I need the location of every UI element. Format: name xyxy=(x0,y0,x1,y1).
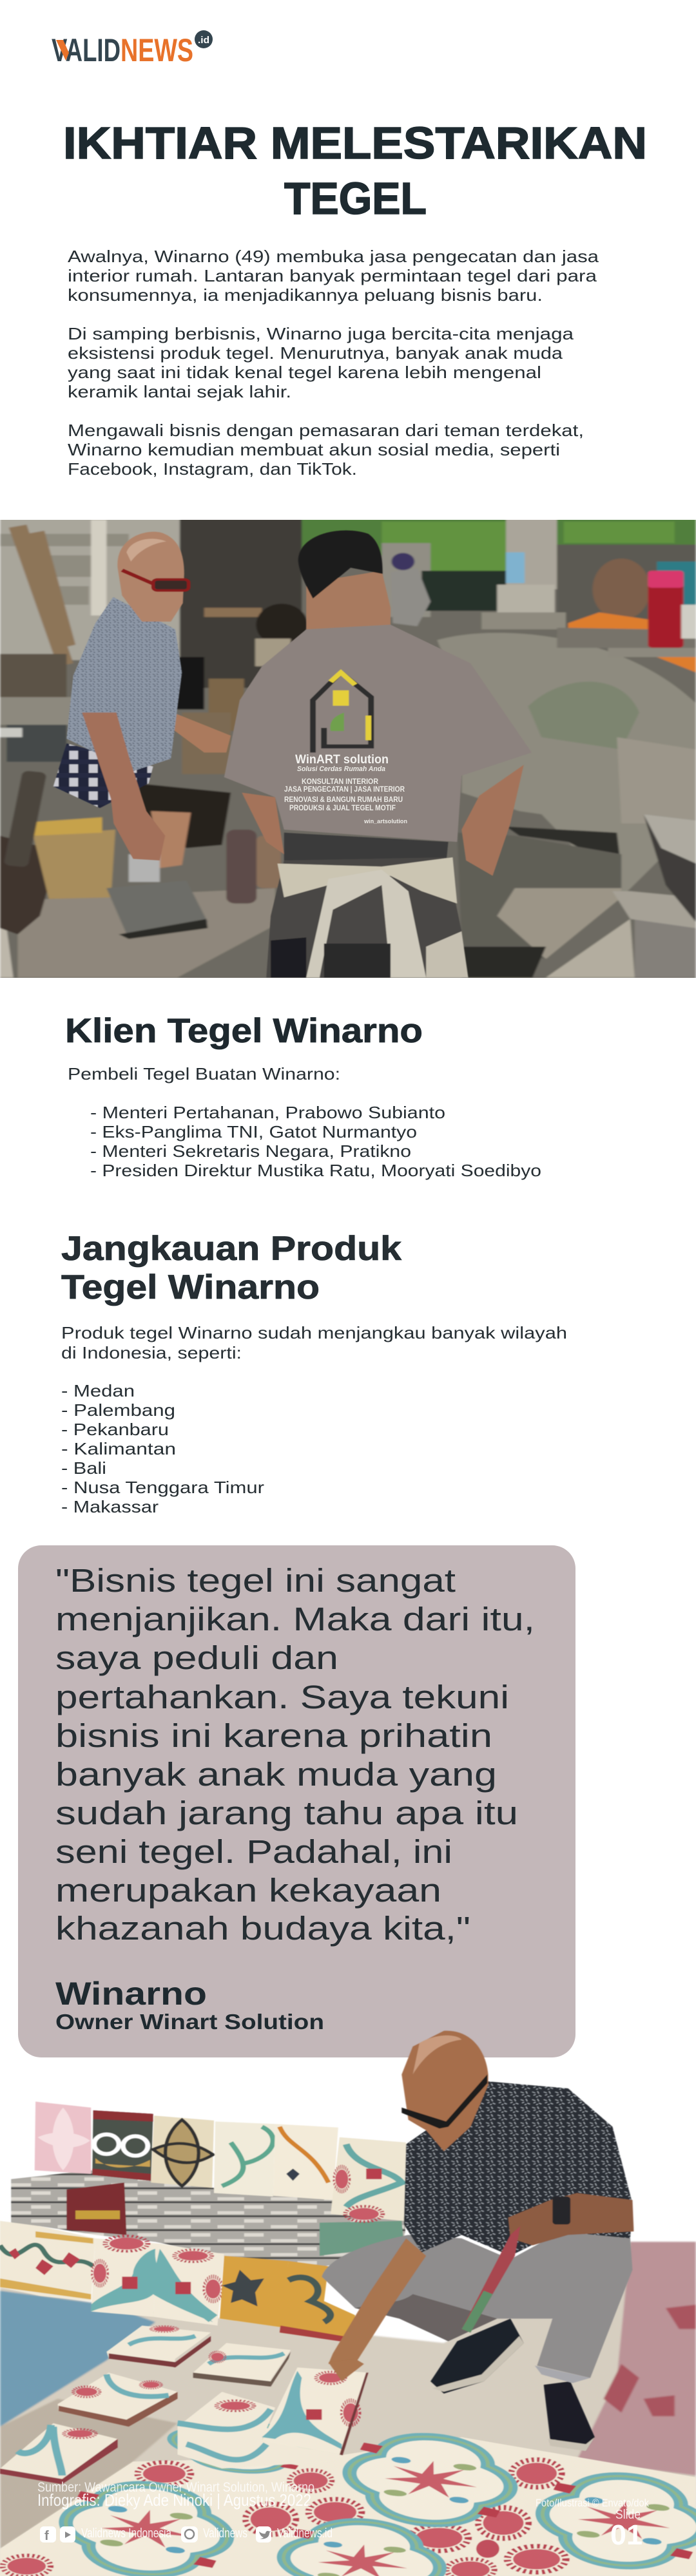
title: IKHTIAR MELESTARIKAN xyxy=(63,118,647,168)
handle: Validnews: Validnews xyxy=(203,2526,247,2541)
handle: Validnews.id: Validnews.id xyxy=(277,2526,333,2541)
quote text: merupakan kekayaan xyxy=(55,1872,441,1909)
slide number: 01 xyxy=(610,2519,643,2551)
logo: Validnews.id: NEWS xyxy=(121,32,193,68)
shirt text: Solusi Cerdas Rumah Anda xyxy=(297,765,385,773)
intro text block: konsumennya, ia menjadikannya peluang bisnis baru. xyxy=(68,285,543,305)
tile carpet xyxy=(0,2414,696,2576)
client list: - Presiden Direktur Mustika Ratu, Mooryati Soedibyo xyxy=(90,1161,541,1180)
region list: - Bali xyxy=(61,1458,106,1478)
intro text block: Mengawali bisnis dengan pemasaran dari teman terdekat, xyxy=(68,421,584,440)
intro text block: interior rumah. Lantaran banyak permintaan tegel dari para xyxy=(68,266,597,285)
social icons and handles xyxy=(40,2526,333,2543)
floor xyxy=(0,2242,696,2576)
region list: - Medan xyxy=(61,1381,135,1400)
quote text xyxy=(55,1562,535,1947)
credits: Infografis: Dieky Ade Ninoki | Agustus 2022 xyxy=(37,2490,311,2510)
credits xyxy=(37,2480,314,2510)
quote text: menjanjikan. Maka dari itu, xyxy=(55,1601,535,1637)
quote text: pertahankan. Saya tekuni xyxy=(55,1679,509,1715)
photo: workshop with Winarno and worker xyxy=(0,515,696,998)
upright tiles xyxy=(35,2102,91,2174)
client list: - Menteri Sekretaris Negara, Pratikno xyxy=(90,1141,411,1161)
intro text block: Di samping berbisnis, Winarno juga bercita-cita menjaga xyxy=(68,324,574,343)
region list: - Kalimantan xyxy=(61,1439,176,1458)
quote attribution: Winarno xyxy=(55,1976,207,2012)
heading: Jangkauan Produk: Jangkauan Produk xyxy=(61,1230,402,1268)
shirt text: RENOVASI & BANGUN RUMAH BARU xyxy=(284,795,403,804)
intro text block: keramik lantai sejak lahir. xyxy=(68,382,291,401)
left man xyxy=(171,712,231,752)
man crouching xyxy=(322,2228,632,2378)
worker xyxy=(306,571,391,636)
quote attribution: Owner Winart Solution xyxy=(55,2010,324,2034)
icon: facebook xyxy=(40,2526,56,2543)
quote attribution xyxy=(55,1976,324,2034)
slide label: Slide xyxy=(615,2508,641,2522)
icon: youtube xyxy=(60,2526,75,2543)
logo: Validnews.id: .id xyxy=(198,35,209,46)
quote text: sudah jarang tahu apa itu xyxy=(55,1795,518,1831)
region list: - Makassar xyxy=(61,1497,159,1516)
client list: - Menteri Pertahanan, Prabowo Subianto xyxy=(90,1103,445,1122)
heading: Klien Tegel Winarno: Klien Tegel Winarno xyxy=(65,1012,423,1050)
client list: Pembeli Tegel Buatan Winarno: xyxy=(68,1064,340,1083)
intro text block xyxy=(68,247,599,479)
photo: Winarno with tiles xyxy=(0,2031,696,2576)
intro text block: Facebook, Instagram, dan TikTok. xyxy=(68,459,357,479)
quote text: khazanah budaya kita," xyxy=(55,1910,470,1947)
title: TEGEL xyxy=(284,173,427,224)
quote text: bisnis ini karena prihatin xyxy=(55,1717,492,1754)
photo credit: Foto/Ilustrasi © Envato/dok xyxy=(536,2497,649,2509)
loose tiles on floor xyxy=(106,2325,211,2367)
heading: Jangkauan Produk xyxy=(61,1230,402,1306)
region list: - Palembang xyxy=(61,1400,175,1420)
client list xyxy=(68,1064,541,1180)
quote text: banyak anak muda yang xyxy=(55,1756,497,1793)
quote text: saya peduli dan xyxy=(55,1639,338,1676)
intro text block: Winarno kemudian membuat akun sosial media, seperti xyxy=(68,440,560,459)
second row tiles xyxy=(0,2221,95,2301)
icon: twitter xyxy=(256,2526,271,2543)
region list xyxy=(61,1323,567,1516)
shirt text: PRODUKSI & JUAL TEGEL MOTIF xyxy=(289,803,396,812)
shirt print: house logo xyxy=(313,673,371,752)
region list: di Indonesia, seperti: xyxy=(61,1343,242,1362)
region list: - Pekanbaru xyxy=(61,1420,169,1439)
icon: facebook: f xyxy=(44,2529,49,2543)
client list: - Eks-Panglima TNI, Gatot Nurmantyo xyxy=(90,1122,417,1141)
quote card xyxy=(18,1545,575,2057)
shirt text: WinART solution xyxy=(295,753,389,767)
region list: Produk tegel Winarno sudah menjangkau banyak wilayah xyxy=(61,1323,567,1342)
shirt text: win_artsolution xyxy=(363,818,407,825)
quote text: seni tegel. Padahal, ini xyxy=(55,1833,452,1870)
intro text block: eksistensi produk tegel. Menurutnya, banyak anak muda xyxy=(68,343,563,363)
shirt text: JASA PENGECATAN | JASA INTERIOR xyxy=(284,785,405,794)
icon: instagram xyxy=(181,2526,198,2543)
handle: Validnews Indonesia: Validnews Indonesia xyxy=(81,2526,172,2541)
region list: - Nusa Tenggara Timur xyxy=(61,1478,264,1497)
intro text block: yang saat ini tidak kenal tegel karena lebih mengenal xyxy=(68,363,541,382)
title xyxy=(63,118,647,224)
logo: Validnews.id: VALID xyxy=(52,32,121,68)
quote text: "Bisnis tegel ini sangat xyxy=(55,1562,456,1599)
logo: Validnews.id xyxy=(52,30,213,68)
shirt text: KONSULTAN INTERIOR xyxy=(302,777,378,786)
intro text block: Awalnya, Winarno (49) membuka jasa pengecatan dan jasa xyxy=(68,247,599,266)
heading: Jangkauan Produk: Tegel Winarno xyxy=(61,1268,320,1306)
stacked tiles xyxy=(11,2170,406,2266)
credits: Sumber: Wawancara Owner Winart Solution, Winarno xyxy=(37,2480,314,2495)
shirt text xyxy=(284,753,407,825)
